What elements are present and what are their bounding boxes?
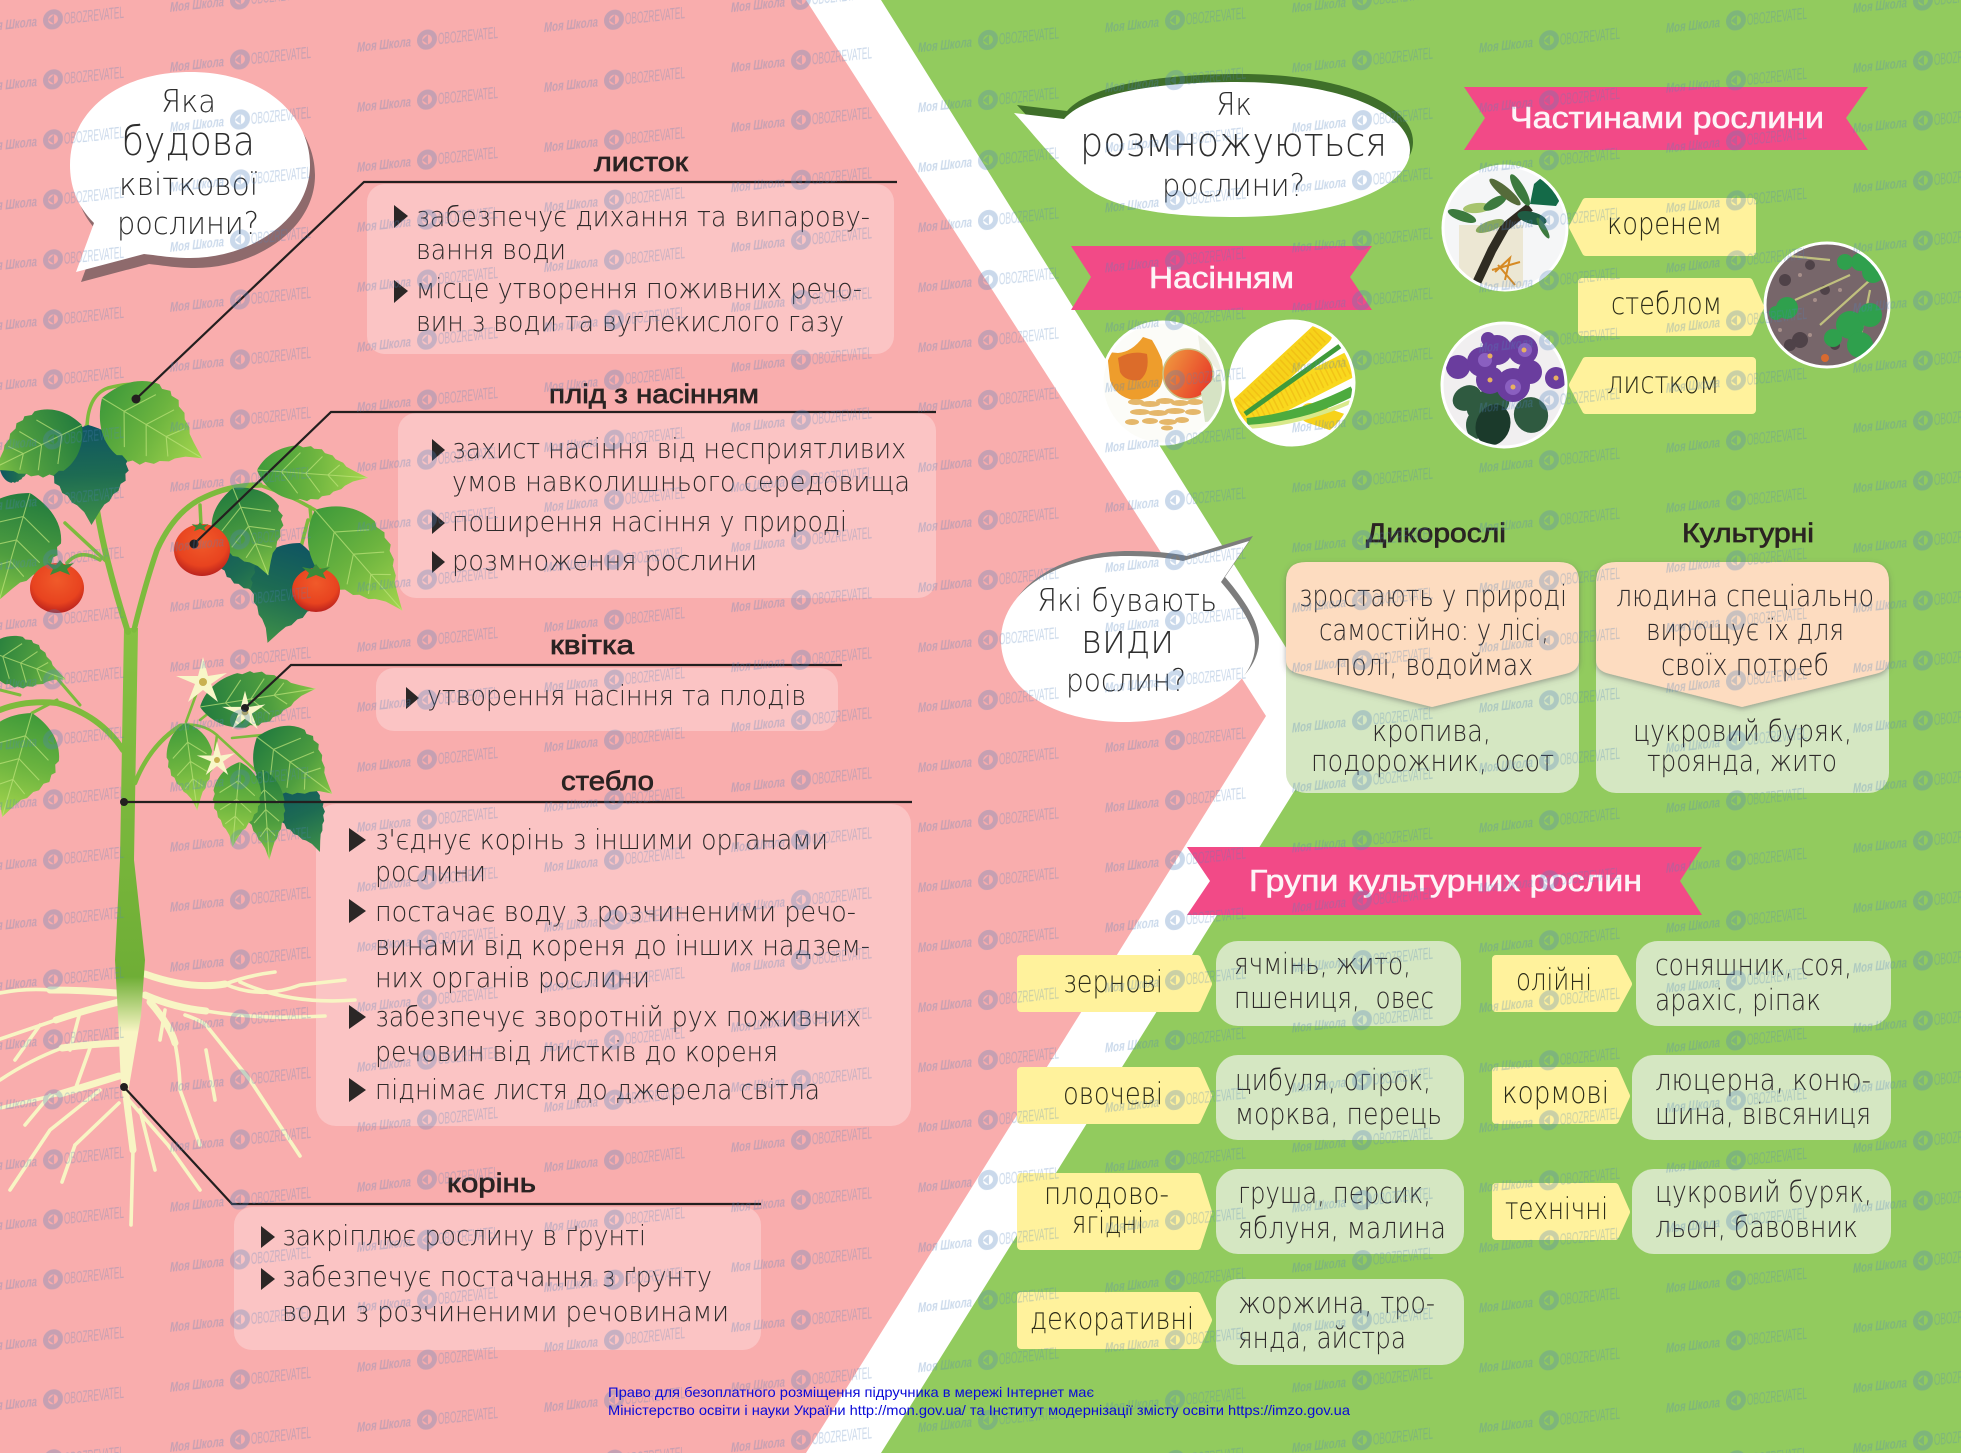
speech bubble: Які бувають види рослин? <box>1001 536 1259 722</box>
panel: культурні <box>1596 562 1889 793</box>
panel: плід з насінням card: розмноження рослини <box>452 544 757 577</box>
photo: corn <box>1230 320 1355 445</box>
label: стеблом: стеблом <box>1611 287 1722 322</box>
speech bubble: Які бувають види рослин?: види <box>1081 617 1174 663</box>
leader line: листок <box>132 182 897 404</box>
panel: культурні: цукровий буряк, <box>1633 714 1852 748</box>
speech bubble: Яка будова квіткової рослини? <box>70 72 315 282</box>
plant branches <box>0 384 315 783</box>
panel: стебло card: рослини <box>375 855 486 888</box>
panel: культурні: троянда, жито <box>1647 744 1837 778</box>
panel: дикорослі: полі, водоймах <box>1335 648 1533 682</box>
speech bubble: Як розмножуються рослини?: розмножуються <box>1080 120 1387 166</box>
heading: плід з насінням: плід з насінням <box>549 379 759 409</box>
photo: pumpkin with seeds <box>1108 324 1222 442</box>
group: овочеві: овочеві <box>1063 1077 1163 1112</box>
label: коренем <box>1573 202 1752 252</box>
panel: плід з насінням card <box>398 413 936 598</box>
group: зернові: зернові <box>1063 965 1163 1000</box>
ribbon: Насінням: Насінням <box>1149 260 1294 295</box>
label: листком: листком <box>1607 366 1719 401</box>
panel: дикорослі: самостійно: у лісі, <box>1319 613 1549 647</box>
panel: дикорослі: кропива, <box>1372 714 1491 748</box>
heading: корінь: корінь <box>447 1168 536 1198</box>
panel: корінь card <box>234 1207 761 1350</box>
group: плодово-ягідні: груша, персик, <box>1238 1176 1431 1210</box>
photo: cutting in glass <box>1444 168 1566 288</box>
group: зернові: ячмінь, жито, <box>1234 947 1411 981</box>
panel: стебло card: речовин від листків до кореня <box>375 1035 778 1068</box>
panel: дикорослі: подорожник, осот <box>1311 744 1554 778</box>
heading: стебло: стебло <box>561 766 654 796</box>
ribbon: Групи культурних рослин: Групи культурних рослин <box>1249 863 1642 898</box>
photo border: cutting, strawberry, violet <box>1442 166 1889 447</box>
group: технічні <box>1496 1169 1891 1254</box>
panel: плід з насінням card: поширення насіння у природі <box>452 505 847 538</box>
plant stem <box>115 628 145 1087</box>
panel: квітка card: утворення насіння та плодів <box>427 679 806 712</box>
leader line: стебло <box>120 798 912 806</box>
speech bubble: Як розмножуються рослини? <box>1014 74 1413 217</box>
photo: strawberry runners <box>1766 244 1888 366</box>
heading: Культурні: Культурні <box>1682 518 1814 548</box>
group: плодово-ягідні: ягідні <box>1072 1206 1144 1241</box>
group: декоративні: декоративні <box>1030 1302 1194 1337</box>
group: зернові <box>1021 941 1461 1026</box>
speech bubble: Яка будова квіткової рослини?: Яка <box>161 84 216 120</box>
footer: license note: Право для безоплатного розміщення підручника в мережі Інтернет має <box>608 1384 1094 1400</box>
speech bubble: Яка будова квіткової рослини?: будова <box>122 119 255 165</box>
panel: дикорослі <box>1286 562 1579 793</box>
panel: листок card: вин з води та вуглекислого газу <box>416 305 844 338</box>
panel: листок card: вання води <box>416 233 566 266</box>
plant leaves <box>0 363 431 861</box>
group: зернові: пшениця, овес <box>1234 981 1434 1015</box>
group: овочеві <box>1021 1055 1464 1140</box>
group: технічні: льон, бавовник <box>1655 1210 1858 1244</box>
photo border: pumpkin and corn <box>1102 321 1354 445</box>
speech bubble: Які бувають види рослин?: рослин? <box>1066 663 1186 699</box>
panel: культурні: вирощує їх для <box>1646 613 1844 647</box>
panel: стебло card: з'єднує корінь з іншими органами <box>375 823 828 856</box>
group: олійні: олійні <box>1516 963 1592 998</box>
photo: violets <box>1444 324 1564 446</box>
speech bubble: Яка будова квіткової рослини?: рослини? <box>117 206 259 242</box>
group: технічні: технічні <box>1505 1192 1608 1227</box>
ribbon: Групи культурних рослин <box>1187 847 1702 915</box>
leader line: квітка <box>241 665 842 712</box>
leader line: корінь <box>120 1083 761 1204</box>
group: олійні <box>1496 941 1891 1026</box>
speech bubble: Як розмножуються рослини?: рослини? <box>1162 168 1305 204</box>
label: коренем: коренем <box>1607 207 1722 242</box>
plant roots <box>0 972 355 1225</box>
icon: flowers <box>176 657 265 775</box>
panel: листок card <box>367 184 894 354</box>
group: плодово-ягідні <box>1021 1169 1464 1254</box>
label: стеблом <box>1582 282 1760 332</box>
group: декоративні <box>1021 1279 1464 1365</box>
panel: стебло card: них органів рослини <box>375 961 650 994</box>
group: олійні: арахіс, ріпак <box>1655 983 1821 1017</box>
panel: стебло card: піднімає листя до джерела світла <box>375 1073 820 1106</box>
panel: корінь card: закріплює рослину в ґрунті <box>282 1219 646 1252</box>
background: pink chevron <box>0 0 1266 1453</box>
group: олійні: соняшник, соя, <box>1655 948 1852 982</box>
leader line: плід <box>190 412 936 548</box>
group: кормові: люцерна, коню- <box>1655 1063 1871 1097</box>
group: плодово-ягідні: яблуня, малина <box>1238 1211 1446 1245</box>
panel: стебло card: винами від кореня до інших надзем- <box>375 929 870 962</box>
speech bubble: Які бувають види рослин?: Які бувають <box>1037 583 1217 619</box>
panel: корінь card: забезпечує постачання з ґрунту <box>282 1260 712 1293</box>
group: кормові: кормові <box>1502 1076 1609 1111</box>
panel: плід з насінням card: захист насіння від несприятливих <box>452 432 906 465</box>
group: декоративні: янда, айстра <box>1238 1321 1406 1355</box>
speech bubble: Як розмножуються рослини?: Як <box>1216 87 1252 123</box>
panel: листок card: забезпечує дихання та випарову- <box>416 200 870 233</box>
panel: листок card: місце утворення поживних речо- <box>416 272 862 305</box>
panel: культурні: людина спеціально <box>1616 579 1874 613</box>
ribbon: Частинами рослини <box>1464 87 1868 150</box>
ribbon: Частинами рослини: Частинами рослини <box>1510 100 1824 135</box>
label: листком <box>1573 361 1752 410</box>
footer: license note <box>608 1384 1350 1418</box>
panel: стебло card <box>316 804 911 1126</box>
group: плодово-ягідні: плодово- <box>1044 1177 1169 1212</box>
group: овочеві: цибуля, огірок, <box>1235 1063 1431 1097</box>
panel: дикорослі: зростають у природі <box>1299 579 1567 613</box>
group: овочеві: морква, перець <box>1235 1097 1442 1131</box>
panel: корінь card: води з розчиненими речовинами <box>282 1295 729 1328</box>
panel: стебло card: забезпечує зворотній рух поживних <box>375 1000 861 1033</box>
speech bubble: Яка будова квіткової рослини?: квіткової <box>119 167 258 203</box>
footer: license note: Міністерство освіти і науки України http://mon.gov.ua/ та Інститут модернізації змісту освіти https://imzo.gov.ua <box>608 1402 1350 1418</box>
group: кормові <box>1496 1055 1891 1140</box>
group: технічні: цукровий буряк, <box>1655 1175 1872 1209</box>
panel: стебло card: постачає воду з розчиненими речо- <box>375 895 856 928</box>
icon: tomatoes <box>30 522 340 613</box>
heading: Дикорослі: Дикорослі <box>1366 518 1506 548</box>
panel: культурні: своїх потреб <box>1661 648 1829 682</box>
ribbon: Насінням <box>1071 246 1372 310</box>
background: white chevron band <box>0 0 1335 1453</box>
heading: листок: листок <box>594 147 688 177</box>
group: декоративні: жоржина, тро- <box>1238 1286 1435 1320</box>
panel: плід з насінням card: умов навколишнього середовища <box>452 465 910 498</box>
heading: квітка: квітка <box>550 630 635 660</box>
panel: квітка card <box>376 668 838 731</box>
illustration: tomato plant <box>0 363 431 1225</box>
group: кормові: шина, вівсяниця <box>1655 1097 1871 1131</box>
